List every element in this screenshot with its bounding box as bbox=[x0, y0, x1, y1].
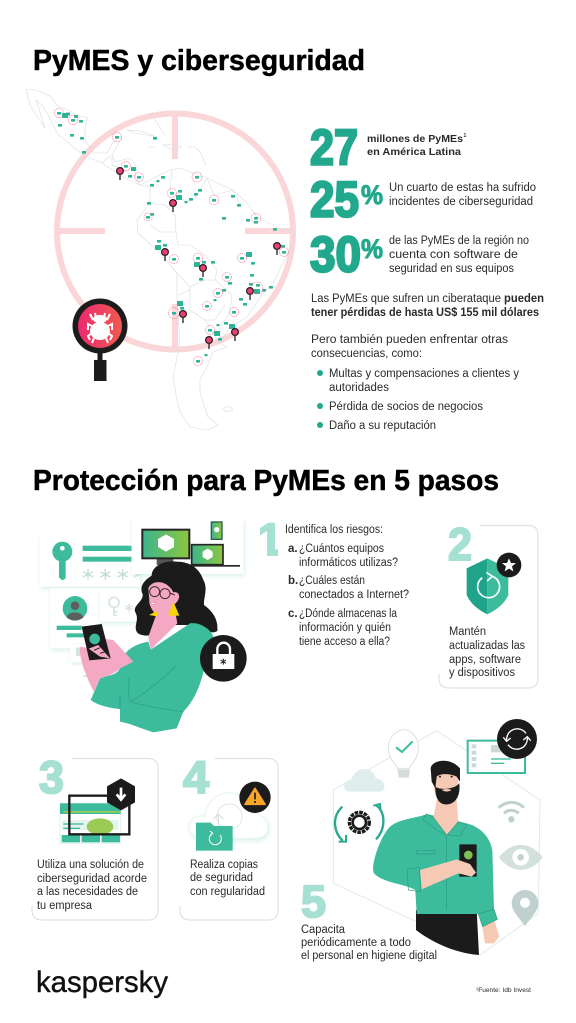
card: lower bbox=[70, 645, 120, 677]
step 3 card bbox=[32, 752, 158, 920]
step 1 text: a. bbox=[288, 543, 298, 555]
step 2 card: Mantén bbox=[449, 626, 486, 638]
icon: light bulb bbox=[388, 729, 418, 778]
step 5 text bbox=[301, 876, 437, 962]
stat: 30%: 30 bbox=[310, 226, 361, 282]
stat: 30%: seguridad en sus equipos bbox=[389, 263, 514, 275]
step 4 card: con regularidad bbox=[190, 886, 265, 898]
map markers bbox=[57, 112, 286, 363]
icon: location pin bbox=[512, 890, 538, 926]
step 5 text: periódicamente a todo bbox=[301, 937, 411, 949]
text block: losses: Las PyMEs que sufren un ciberataque bbox=[311, 293, 501, 305]
stat: 25%: % bbox=[361, 180, 383, 210]
pink location pins bbox=[117, 168, 280, 349]
step 1 text: informáticos utilizas? bbox=[299, 557, 398, 569]
logo: kaspersky: kaspersky bbox=[36, 966, 168, 999]
step 4 card: Realiza copias bbox=[190, 859, 258, 871]
card: user profile bbox=[50, 588, 100, 648]
step 1 text: información y quién bbox=[299, 622, 391, 634]
card: faded key bbox=[100, 588, 153, 622]
icon: shield with refresh bbox=[467, 553, 521, 614]
icon: document window bbox=[468, 719, 537, 773]
step 1 text: 1 bbox=[258, 514, 282, 565]
step 3 card: a las necesidades de bbox=[37, 886, 138, 898]
text block: consequences: consecuencias, como: bbox=[311, 348, 422, 360]
text block: consequences: Pero también pueden enfrentar otras bbox=[311, 334, 508, 346]
stat: 27 millones: 1 bbox=[464, 133, 466, 139]
stat: 25%: Un cuarto de estas ha sufrido bbox=[389, 182, 536, 194]
icon: gear with arrows bbox=[335, 804, 383, 842]
step 2 card: apps, software bbox=[449, 654, 521, 666]
step 5 text: Capacita bbox=[301, 924, 346, 936]
step 3 card: tu empresa bbox=[37, 900, 93, 912]
icon: wifi bbox=[499, 802, 524, 821]
stat: 27 millones bbox=[310, 120, 466, 176]
icon: magnifier with bug bbox=[72, 298, 128, 381]
man figure bbox=[373, 761, 499, 955]
card: password key bbox=[40, 533, 140, 587]
step 5 text: el personal en higiene digital bbox=[301, 950, 437, 962]
heading: Protección para PyMEs en 5 pasos: Protección para PyMEs en 5 pasos bbox=[33, 465, 499, 497]
step 1 text bbox=[255, 514, 409, 648]
text block: consequences: Daño a su reputación bbox=[329, 420, 436, 432]
icon: cloud bbox=[344, 769, 384, 792]
stat: 27 millones: en América Latina bbox=[367, 146, 461, 158]
footnote: source: ¹Fuente: Idb Invest bbox=[476, 987, 531, 994]
stat: 30%: cuenta con software de bbox=[389, 249, 518, 261]
step 2 card: actualizadas las bbox=[449, 640, 525, 652]
text block: losses: tener pérdidas de hasta US$ 155 mil dólares bbox=[311, 307, 539, 319]
stat: 27 millones: 27 bbox=[310, 120, 358, 176]
step 3 card: ciberseguridad acorde bbox=[37, 873, 147, 885]
stat: 27 millones: millones de PyMEs bbox=[367, 133, 463, 145]
step 2 card: y dispositivos bbox=[449, 667, 515, 679]
icon: eye bbox=[499, 845, 543, 870]
step 5 illustration: man and icons bbox=[333, 719, 543, 955]
step 1 text: tiene acceso a ella? bbox=[299, 636, 390, 648]
text block: consequences: autoridades bbox=[329, 382, 389, 394]
text block: consequences: Multas y compensaciones a clientes y bbox=[329, 368, 519, 380]
step 1 text: b. bbox=[288, 575, 298, 587]
step 1 text: ¿Dónde almacenas la bbox=[299, 608, 398, 620]
icon: cloud backup bbox=[189, 782, 271, 851]
illustration: woman with security cards bbox=[40, 518, 247, 732]
stat: 30% bbox=[310, 226, 529, 282]
step 1 text: c. bbox=[288, 608, 298, 620]
step 1 text: ¿Cuántos equipos bbox=[299, 543, 384, 555]
title: PyMES y ciberseguridad: PyMES y ciberseguridad bbox=[33, 45, 365, 77]
step 3 card: Utiliza una solución de bbox=[37, 859, 144, 871]
step 4 card: de seguridad bbox=[190, 872, 253, 884]
woman figure bbox=[80, 561, 217, 732]
stat: 30%: de las PyMEs de la región no bbox=[389, 235, 529, 247]
step 1 text: conectados a Internet? bbox=[299, 589, 409, 601]
text block: consequences bbox=[311, 334, 519, 432]
stat: 25% bbox=[310, 172, 536, 228]
card: devices bbox=[132, 518, 243, 574]
text block: losses bbox=[311, 293, 544, 319]
step 5 text: 5 bbox=[301, 876, 326, 927]
dashed target rings bbox=[54, 108, 289, 365]
step 3 card: 3 bbox=[39, 752, 64, 803]
map outline bbox=[26, 89, 295, 430]
step 2 card: 2 bbox=[448, 519, 472, 570]
map panel: Latin America with crosshair bbox=[26, 89, 295, 430]
step 2 card bbox=[439, 519, 538, 688]
stat: 30%: % bbox=[361, 234, 383, 264]
icon: lock badge bbox=[200, 635, 247, 682]
step 1 text: Identifica los riesgos: bbox=[285, 524, 383, 536]
step 1 text: ¿Cuáles están bbox=[299, 575, 365, 587]
step 4 card bbox=[180, 752, 278, 920]
stat: 25%: 25 bbox=[310, 172, 359, 228]
step 4 card: 4 bbox=[183, 752, 209, 803]
stat: 25%: incidentes de ciberseguridad bbox=[389, 196, 533, 208]
text block: losses: pueden bbox=[504, 293, 544, 305]
icon: software window bbox=[60, 778, 135, 843]
crosshair target bbox=[57, 112, 294, 350]
text block: consequences: Pérdida de socios de negocios bbox=[329, 401, 483, 413]
